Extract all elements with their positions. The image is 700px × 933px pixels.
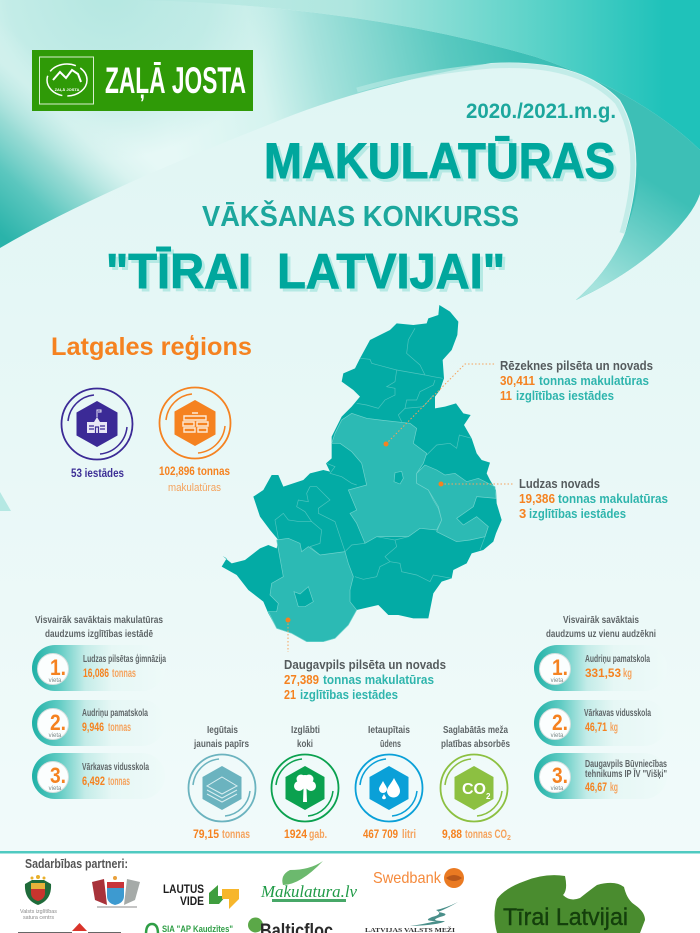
stat: saved trees: gab.: [309, 827, 327, 841]
rank 2: Vārkavas vidusskola: [584, 707, 651, 719]
rank 2: vieta: [551, 733, 564, 739]
callout: Ludzas: 3: [519, 506, 526, 521]
rank 3: 3.: [50, 763, 66, 788]
rank 3: Vārkavas vidusskola: [82, 761, 149, 773]
logo: municipal crest: [92, 876, 140, 908]
rank 3: vieta: [49, 786, 62, 792]
panel heading: [546, 614, 656, 640]
rank 2: 2.: [552, 710, 568, 735]
stat: saved water: 467 709: [363, 827, 398, 841]
map: Latgale region: [222, 305, 502, 642]
callout: Rēzeknes: 30,411: [500, 373, 535, 388]
stat: new paper: tonnas: [222, 827, 250, 841]
value: 102,896 tonnas: [159, 464, 230, 478]
district borders: [275, 328, 485, 582]
panel: most collected per institution: [32, 614, 166, 799]
rank 2: kg: [610, 720, 618, 734]
leader line: [441, 483, 513, 485]
logo: Balticfloc: [248, 918, 333, 933]
rank 2: 2.: [50, 710, 66, 735]
stat: saved water: Ietaupītais: [368, 724, 410, 736]
callout: Daugavpils: tonnas makulatūras: [323, 672, 434, 687]
callout text: Rēzeknes pilsēta un novads: [500, 358, 653, 373]
stat: saved water: ūdens: [380, 738, 401, 750]
rank 3: 3.: [552, 763, 568, 788]
rank 1: vieta: [49, 678, 62, 684]
logo: Valsts izglītības satura centrs: [20, 875, 57, 921]
callout: Rēzeknes: [384, 358, 653, 446]
rank 3: tonnas: [108, 774, 130, 788]
callout: Rēzeknes: 11: [500, 388, 512, 403]
logo: house partner: [18, 923, 121, 933]
region heading: Latgales reģions: [51, 333, 252, 361]
icon: paper stacks: [160, 388, 230, 458]
leader line: [287, 620, 289, 652]
value: 53 iestādes: [71, 466, 124, 480]
panel heading: [35, 614, 163, 640]
stat: saved trees: [272, 724, 338, 841]
heading: vākšanas konkurss: VĀKŠANAS KONKURSS: [202, 199, 519, 233]
district: Ludzas novads: [417, 465, 496, 542]
stat: saved water: [356, 724, 422, 841]
heading: makulatūras: MAKULATŪRAS: [264, 133, 615, 189]
stat: saved trees: Izglābti: [291, 724, 320, 736]
footer: partners: [0, 851, 700, 933]
rank 3: 46,67: [585, 780, 607, 794]
school year: 2020./2021.m.g.: [466, 100, 616, 123]
stat: saved water: litri: [402, 827, 416, 841]
logo: Swedbank: Swedbank: [373, 870, 442, 887]
stat: new paper: jaunais papīrs: [193, 738, 249, 750]
icon: CO2: 2: [486, 792, 491, 801]
callout: Rēzeknes: izglītības iestādes: [516, 388, 614, 403]
rank 1: 16,086: [83, 666, 109, 680]
rank 3: [534, 753, 667, 799]
stat: CO2 absorbed: Saglabātās meža: [443, 724, 508, 736]
rank 2: 9,946: [82, 720, 104, 734]
callout: Daugavpils: izglītības iestādes: [300, 687, 398, 702]
rank 3: kg: [610, 780, 618, 794]
stat: institutions: [62, 388, 132, 480]
rank 2: [32, 700, 165, 746]
rank 3: 6,492: [82, 774, 105, 788]
rank 3: [32, 753, 165, 799]
logo: Zaļā josta: ZAĻĀ JOSTA: [55, 87, 80, 92]
stat: CO2 absorbed: [440, 724, 511, 842]
icon: CO2: [440, 754, 508, 822]
rank 2: vieta: [49, 733, 62, 739]
leader line: [386, 364, 495, 444]
stat: CO2 absorbed: 2: [507, 835, 511, 842]
icon: school: [62, 388, 132, 460]
icon: paper: [188, 754, 256, 822]
logo: Latvijas valsts meži: [365, 902, 458, 933]
panel heading: daudzums uz vienu audzēkni: [546, 628, 656, 640]
logo: Valsts izglītības satura centrs: satura centrs: [23, 915, 54, 921]
logo: Tīrai Latvijai: Tīrai Latvijai: [503, 904, 628, 931]
panel heading: Visvairāk savāktais: [563, 614, 639, 626]
logo: Lautus Vide: [163, 882, 239, 909]
logo: Lautus Vide: LAUTUS: [163, 882, 204, 896]
panel heading: Visvairāk savāktais makulatūras: [35, 614, 163, 626]
icon: CO2: CO: [462, 781, 486, 798]
rank 1: tonnas: [112, 666, 136, 680]
rank 1: [32, 645, 166, 691]
logo: Zaļā josta: ZAĻĀ JOSTA: [105, 60, 246, 102]
partners heading: Sadarbības partneri:: [25, 857, 128, 871]
rank 3: tehnikums IP ĪV "Višķi": [585, 768, 667, 780]
rank 1: 331,53: [585, 666, 621, 680]
title block: [106, 100, 616, 299]
icon: water drops: [356, 754, 422, 822]
logo: Valsts izglītības satura centrs: Valsts izglītības: [20, 909, 57, 915]
logo: Makulatura.lv: Makulatura.lv: [260, 882, 357, 901]
rank 2: [534, 700, 667, 746]
stat: new paper: 79,15: [193, 827, 219, 841]
stat: saved trees: 1924: [284, 827, 307, 841]
callout text: Ludzas novads: [519, 476, 600, 491]
stat: new paper: [188, 724, 256, 841]
rank 1: Ludzas pilsētas ģimnāzija: [83, 652, 166, 665]
stat: CO2 absorbed: 9,88: [442, 827, 462, 841]
logo: Lautus Vide: VIDE: [180, 894, 204, 908]
rank 1: kg: [623, 666, 632, 680]
rank 2: 46,71: [585, 720, 607, 734]
logo: Swedbank: [373, 868, 464, 888]
panel: most collected per pupil: [534, 614, 667, 799]
logo: Makulatura.lv: [260, 861, 357, 902]
callout: Ludzas: tonnas makulatūras: [558, 491, 668, 506]
callout: Ludzas: 19,386: [519, 491, 555, 506]
rank 2: Audriņu pamatskola: [82, 707, 148, 719]
logo: Zaļā josta: [32, 50, 253, 111]
rank 1: Audriņu pamatskola: [585, 653, 650, 665]
heading: Tīrai Latvijai: "TĪRAI LATVIJAI": [106, 245, 505, 299]
stat: tonnes collected: [159, 388, 230, 494]
callout text: Daugavpils pilsēta un novads: [284, 657, 446, 672]
stat: CO2 absorbed: platības absorbēs: [441, 738, 510, 750]
district: Daugavpils pilsēta un novads: [268, 538, 357, 642]
rank 2: tonnas: [108, 720, 131, 734]
icon: tree: [272, 754, 338, 822]
stat: new paper: Iegūtais: [207, 724, 238, 736]
callout: Rēzeknes: tonnas makulatūras: [539, 373, 649, 388]
rank 1: 1.: [50, 655, 66, 680]
rank 1: vieta: [551, 678, 564, 684]
callout: Ludzas: izglītības iestādes: [529, 506, 626, 521]
callout: Daugavpils: 21: [284, 687, 296, 702]
stat: saved trees: koki: [297, 738, 313, 750]
map outline: [222, 305, 502, 642]
rank 1: [534, 645, 667, 691]
rank 1: 1.: [552, 655, 568, 680]
unit: makulatūras: [168, 482, 221, 494]
callout: Daugavpils: 27,389: [284, 672, 319, 687]
callout: Ludzas: [438, 476, 668, 521]
stat: CO2 absorbed: tonnas CO: [465, 827, 507, 841]
rank 3: vieta: [551, 786, 564, 792]
logo: Tīrai Latvijai: [494, 875, 645, 933]
panel heading: daudzums izglītības iestādē: [45, 628, 153, 640]
callout: Daugavpils: [284, 618, 446, 702]
district: Rēzeknes pilsēta un novads: [332, 413, 442, 543]
